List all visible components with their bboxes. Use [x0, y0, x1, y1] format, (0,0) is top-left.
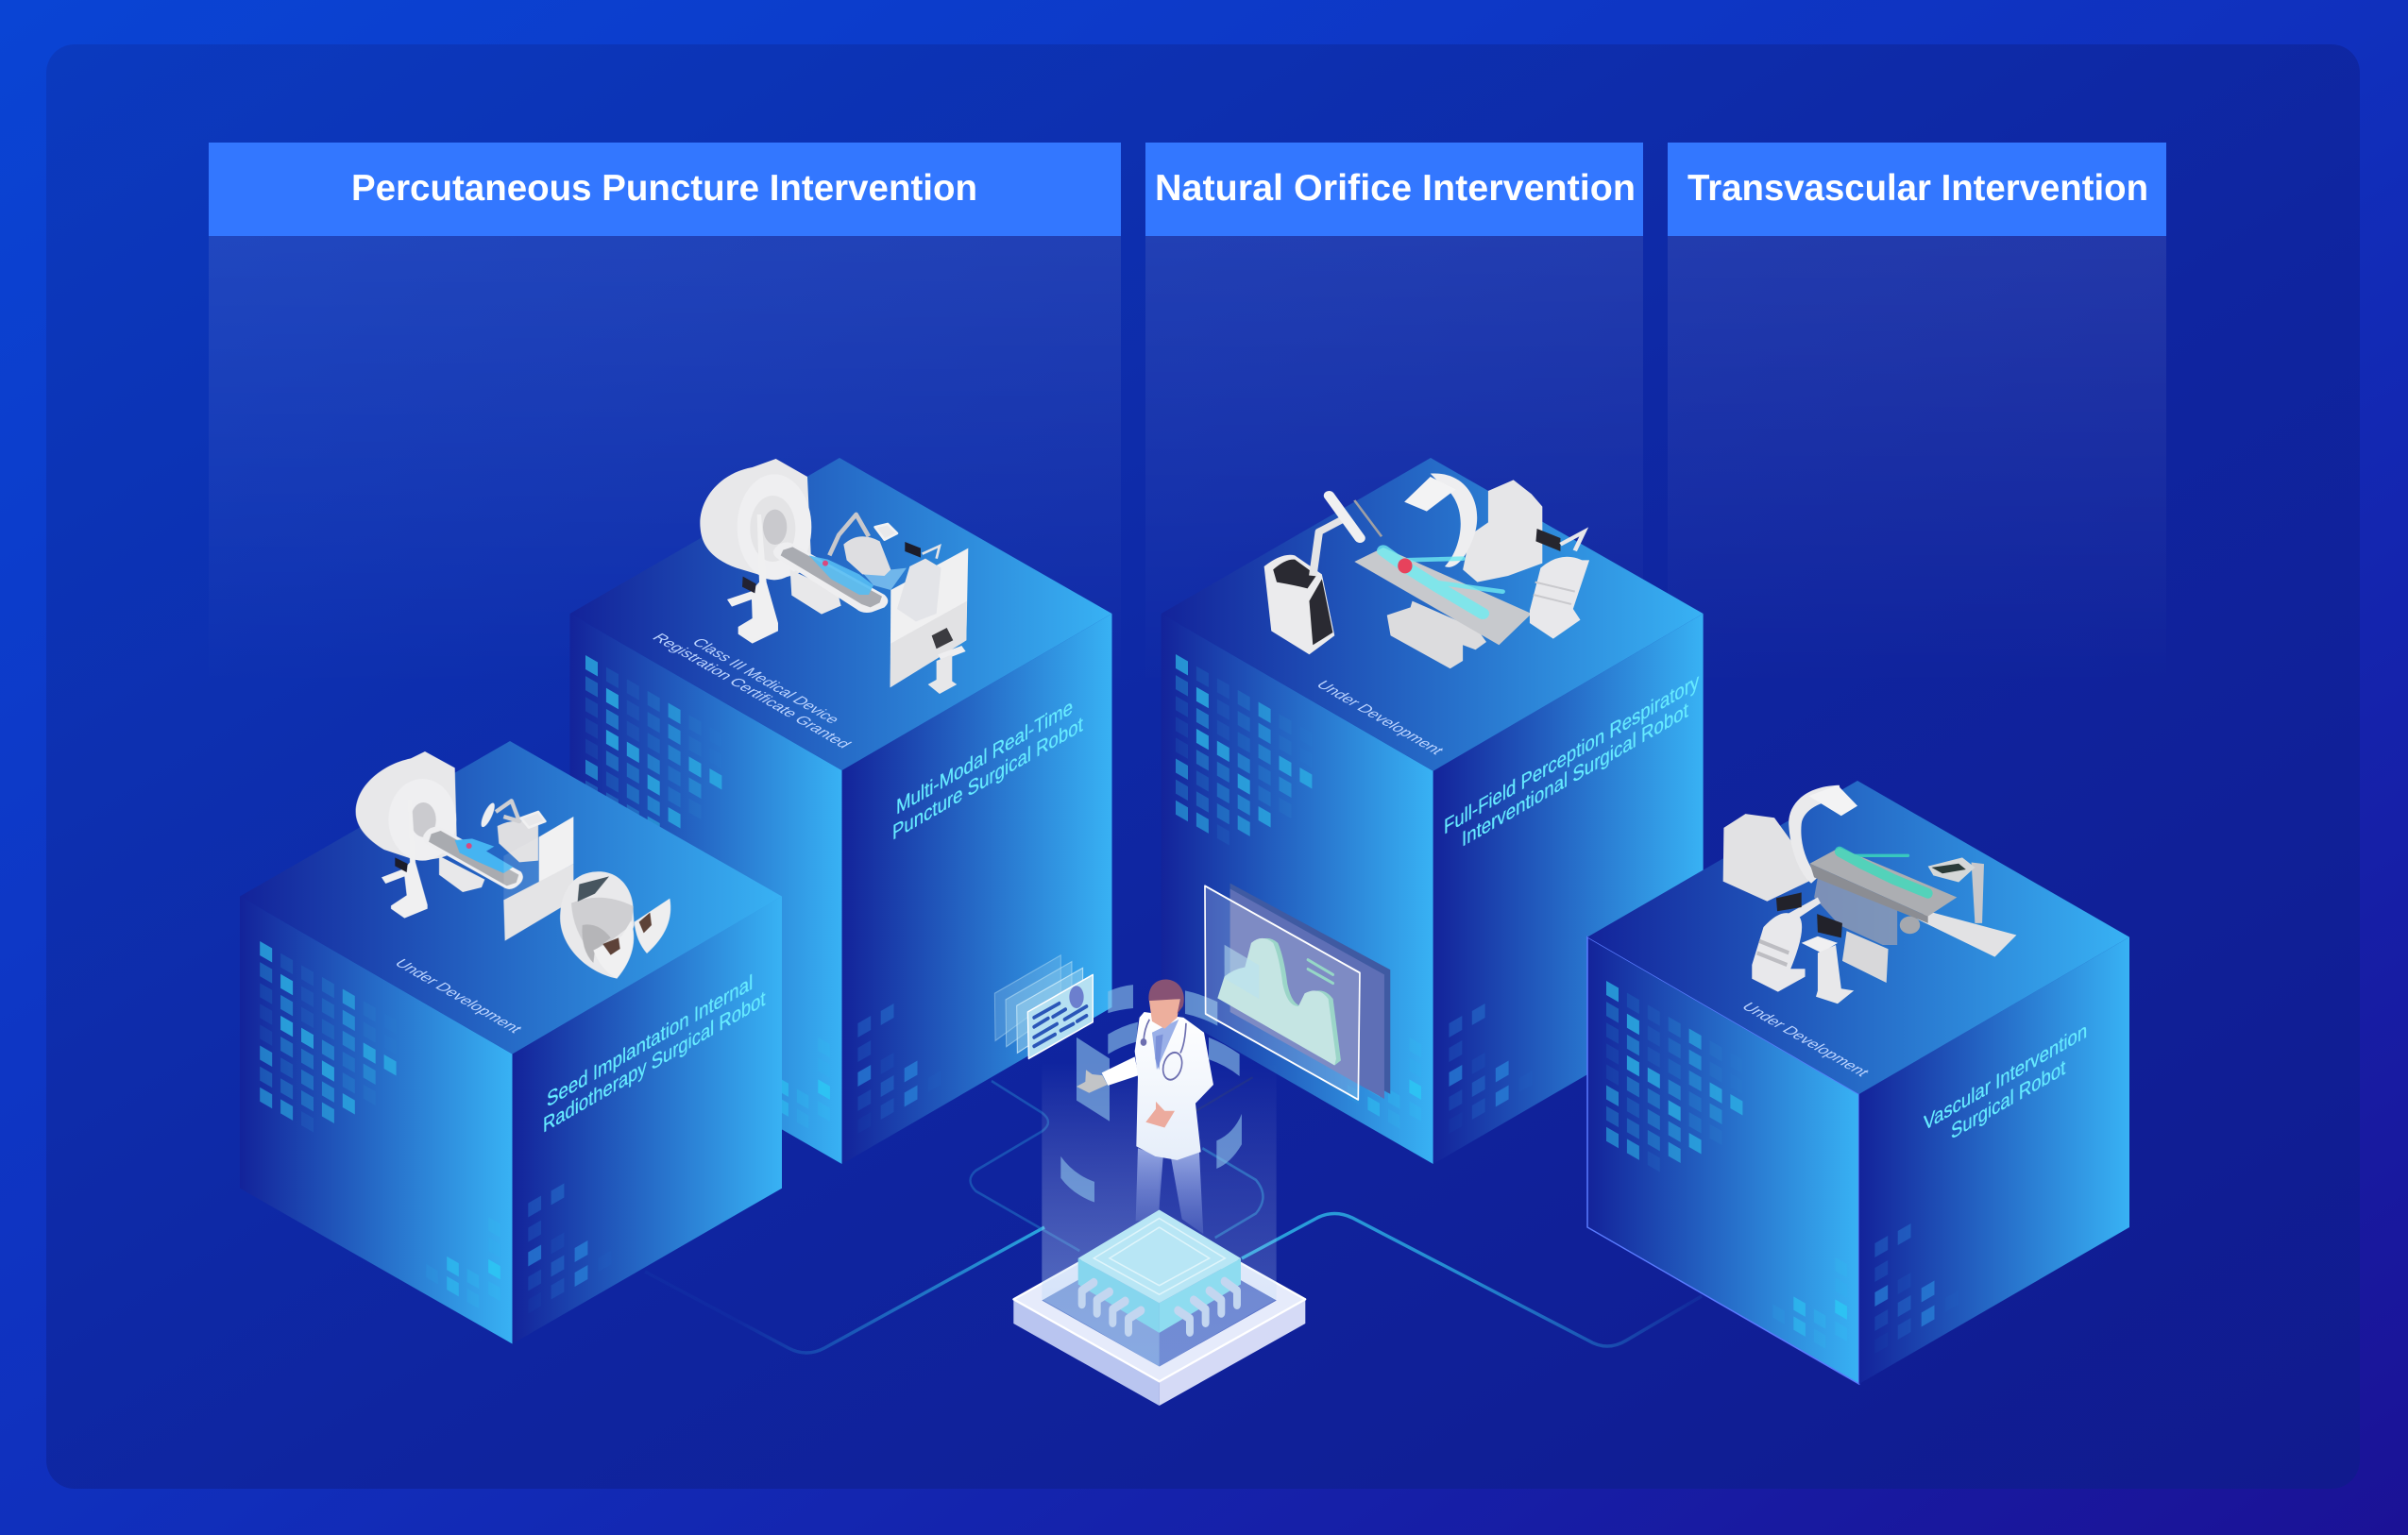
top face: [570, 458, 1112, 770]
equipment: C-arm with vascular robot: [1723, 785, 2016, 1004]
legs: [1136, 1148, 1203, 1234]
header: Natural Orifice Intervention: [1145, 143, 1643, 236]
status label: Registration Certificate Granted: [649, 631, 856, 751]
right face: [1433, 614, 1704, 1164]
holographic chart screen: [1205, 884, 1390, 1100]
product name: Surgical Robot: [1951, 1054, 2065, 1144]
header: Transvascular Intervention: Transvascular Intervention: [1687, 168, 2148, 209]
right face: [1859, 937, 2129, 1384]
equipment: MRI with puncture robot: [700, 459, 968, 694]
cube: multi-modal robot: [570, 458, 1112, 1164]
central illustration: [970, 884, 1390, 1406]
status label: Class III Medical Device: [688, 635, 844, 726]
product name: Vascular Intervention: [1924, 1018, 2087, 1136]
holographic arc segments: [1060, 985, 1242, 1203]
header: Percutaneous Puncture Intervention: Percutaneous Puncture Intervention: [351, 168, 977, 209]
right face: [512, 897, 782, 1344]
right face corner tiles: [857, 1004, 941, 1134]
right face: [842, 614, 1112, 1164]
left face pixel grid: [260, 941, 397, 1180]
chip: [1078, 1209, 1241, 1333]
header: Transvascular Intervention: [1668, 143, 2166, 236]
cube: vascular intervention robot: [1587, 781, 2129, 1384]
right face corner tiles: [528, 1184, 611, 1313]
cube: seed implantation robot: [240, 741, 782, 1344]
hologram column: [1042, 1062, 1277, 1366]
product name: Multi-Modal Real-Time: [896, 694, 1073, 819]
chip pins: [1082, 1281, 1237, 1332]
floating data cards: [994, 955, 1093, 1058]
category column: percutaneous: [209, 143, 1121, 689]
doctor: [1077, 979, 1213, 1160]
top face: [240, 741, 782, 1054]
base plate: [1013, 1217, 1305, 1406]
status label: Under Development: [1738, 1000, 1874, 1079]
floor connector left: [645, 1227, 1044, 1353]
left face: [1587, 937, 1859, 1384]
left face pixel grid: [1606, 981, 1742, 1220]
product name: Interventional Surgical Robot: [1462, 697, 1688, 852]
left face: [570, 614, 842, 1164]
equipment: MRI, robot and capsule: [356, 751, 670, 979]
status label: Under Development: [391, 956, 527, 1036]
dim connector loops: [970, 1077, 1263, 1251]
header: Natural Orifice Intervention: Natural Orifice Intervention: [1155, 168, 1636, 209]
status label: Under Development: [1313, 678, 1449, 757]
left face corner tiles: [1347, 1037, 1421, 1129]
cube: full-field perception robot: [1162, 458, 1704, 1164]
top face: [1587, 781, 2129, 1094]
right face corner tiles: [1874, 1223, 1959, 1354]
equipment: C-arm with robot and patient: [1264, 473, 1589, 668]
category column: transvascular: [1668, 143, 2166, 689]
left face pixel grid: [1176, 654, 1312, 893]
product name: Puncture Surgical Robot: [892, 711, 1083, 845]
left face: [1162, 614, 1433, 1164]
top face: [1162, 458, 1704, 771]
product name: Full-Field Perception Respiratory: [1444, 668, 1699, 839]
right face corner tiles: [1449, 1004, 1533, 1134]
category column: natural orifice: [1145, 143, 1643, 689]
product name: Radiotherapy Surgical Robot: [543, 986, 766, 1138]
left face pixel grid: [585, 655, 721, 894]
left face corner tiles: [426, 1217, 500, 1308]
left face: [240, 897, 512, 1344]
left face corner tiles: [1772, 1257, 1847, 1349]
header: Percutaneous Puncture Intervention: [209, 143, 1121, 236]
product name: Seed Implantation Internal: [547, 970, 753, 1112]
floor connector right: [1242, 1214, 1702, 1346]
left face corner tiles: [755, 1037, 830, 1129]
